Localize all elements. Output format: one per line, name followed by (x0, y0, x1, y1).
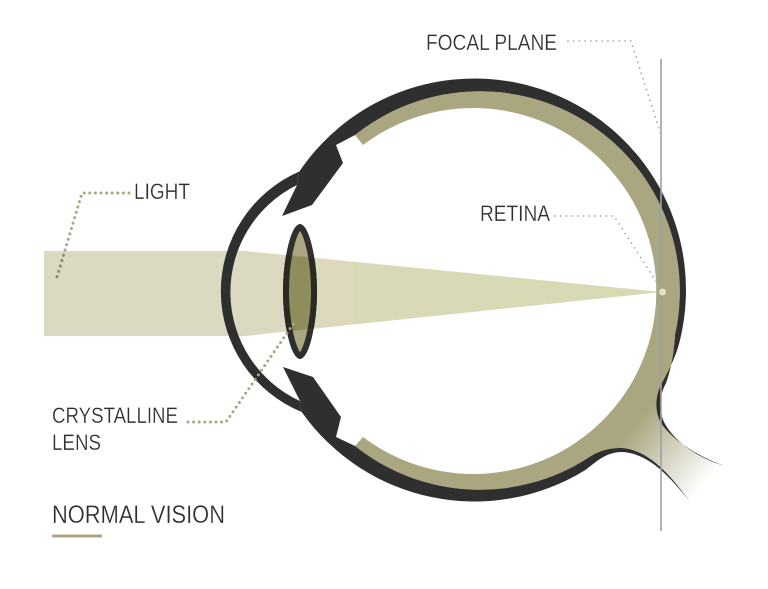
cornea (221, 172, 302, 412)
label: focal plane: FOCAL PLANE (426, 30, 557, 55)
title underline (52, 534, 102, 538)
upper eye wall and iris wedge (282, 78, 725, 466)
label: crystalline lens: LENS (52, 430, 101, 455)
retina and sclera tan layer with optic nerve (355, 91, 725, 502)
leader: light (57, 193, 129, 277)
focal plane line (660, 59, 662, 531)
leader: retina (555, 216, 659, 286)
label: retina: RETINA (480, 201, 550, 226)
retina focus point (659, 288, 666, 296)
leader: focal plane (568, 41, 661, 135)
leader: crystalline lens (188, 320, 296, 422)
crystalline lens (286, 227, 314, 356)
lower eye wall and iris wedge (283, 367, 690, 502)
label: crystalline lens: CRYSTALLINE (52, 403, 178, 428)
light beam (44, 251, 662, 336)
diagram: normal vision eye (44, 34, 724, 538)
title: normal vision: NORMAL VISION (52, 501, 225, 529)
label: light: LIGHT (134, 179, 190, 204)
label: crystalline lens (52, 403, 178, 455)
